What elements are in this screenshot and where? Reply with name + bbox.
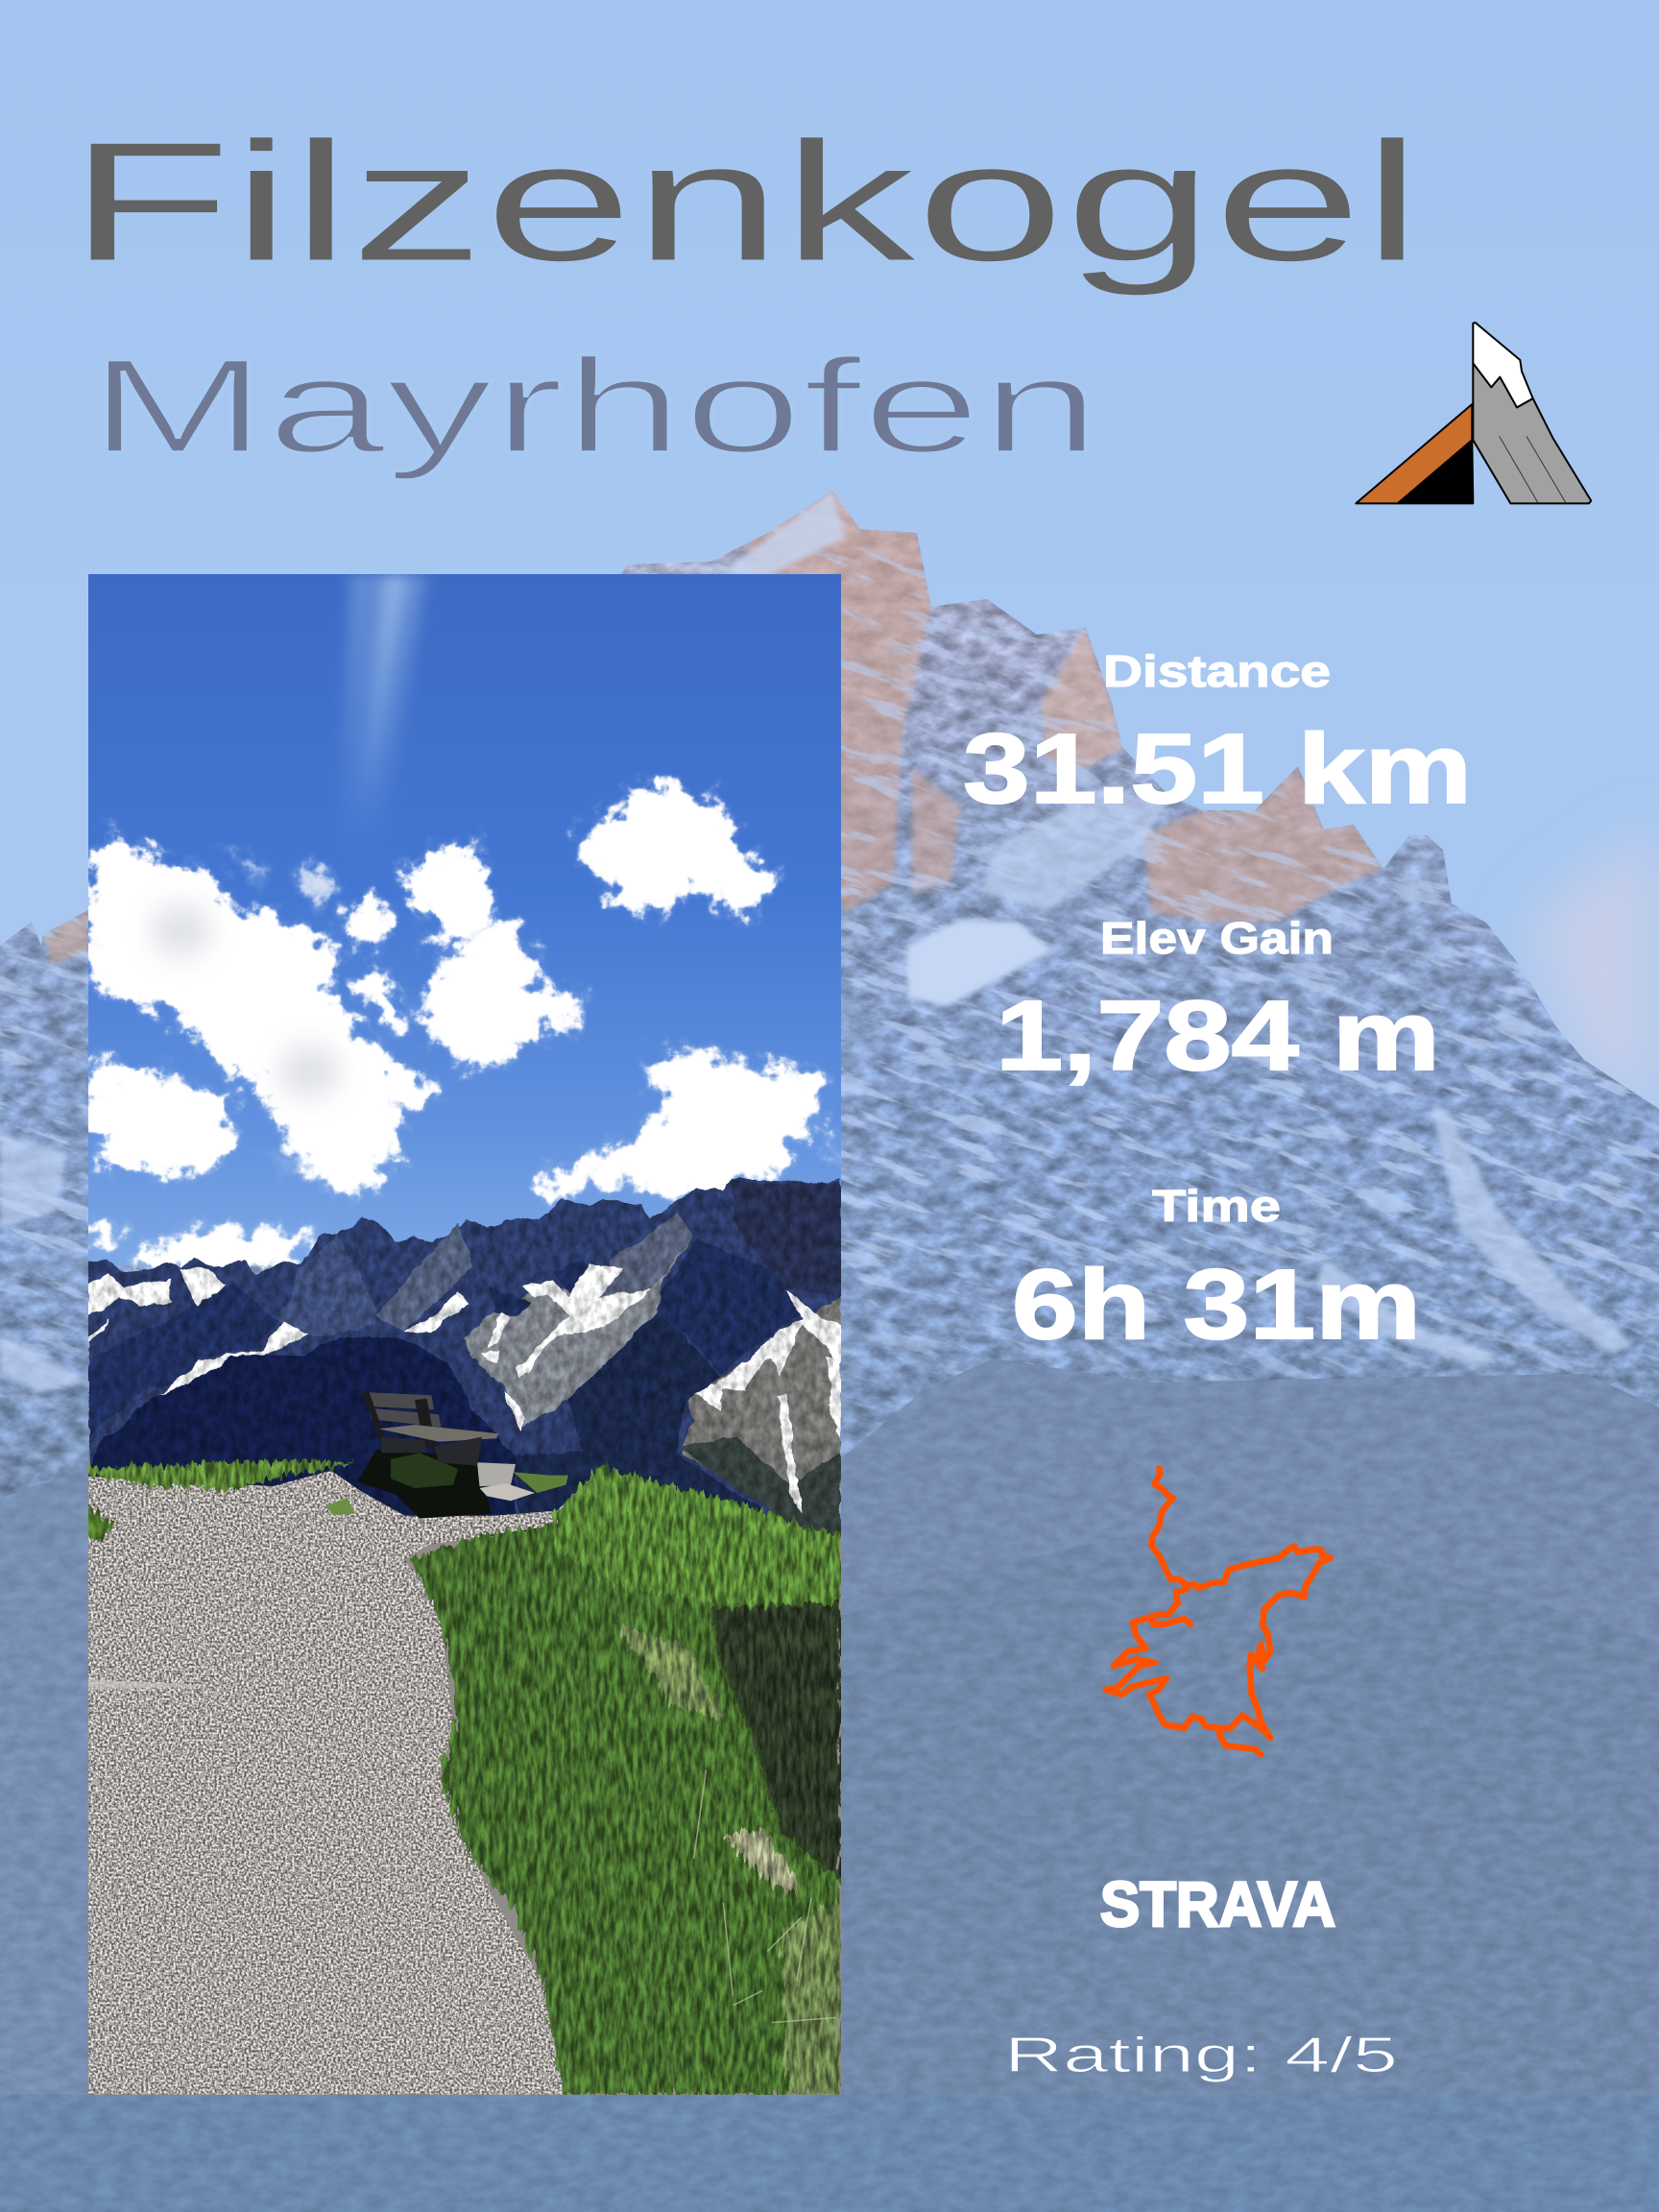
distance value: 31.51 km [963,713,1472,824]
time value: 6h 31m [1012,1249,1421,1359]
icon: mountain logo [1356,323,1591,503]
front hill [841,1543,1659,2095]
distant mountains [88,1178,841,1539]
strava logo: STRAVA [1100,1868,1335,1939]
bench legs [381,1437,482,1466]
pink cloud haze at right [1527,826,1659,1123]
elevation value: 1,784 m [996,980,1440,1091]
title: Filzenkogel [68,107,1422,297]
dark foreground hill [88,1337,516,1539]
dark forest slope [516,1312,760,1539]
distance label: Distance [1103,646,1331,696]
sunlit rock faces [280,1236,376,1337]
rear ridge [841,1359,1659,1642]
scree [463,1238,693,1428]
small grass patches [326,1498,355,1515]
rating: Rating: 4/5 [1004,2028,1398,2083]
bench and shadow [326,1392,568,1519]
grass slope [88,1459,841,2095]
elevation label: Elev Gain [1100,913,1334,963]
bottom band [0,2095,841,2212]
left lower slope [0,1469,88,2095]
route map [1106,1468,1331,1754]
time label: Time [1152,1181,1281,1231]
snow bands [0,787,1632,1392]
grass blades [694,1770,836,2023]
cloud shading [150,906,341,1095]
ground backing [88,1536,841,2095]
big snow field [907,920,1053,1006]
shadowed faces [660,1238,804,1373]
stat: distance [963,646,1472,824]
clouds [88,789,839,1273]
stones [477,1462,516,1486]
bench backrest [362,1392,442,1428]
panel: hiking photo [88,574,841,2095]
clump grass [391,1453,458,1488]
path seam [88,1679,211,1690]
lower right slope [679,1296,841,1539]
stat: time [1012,1181,1421,1359]
photo sky [88,574,841,1265]
snow flecks [0,491,1659,1444]
pale summit snow [649,492,847,574]
clump shadow [357,1450,492,1519]
stat: elevation gain [996,913,1440,1091]
orange alpenglow rock [43,491,1383,965]
background mountain [0,491,1659,2212]
bench seat [378,1425,499,1442]
sun ray [338,574,427,864]
subtitle: Mayrhofen [88,330,1100,481]
snow patches [88,1264,841,1514]
gravel path [88,1469,601,2095]
